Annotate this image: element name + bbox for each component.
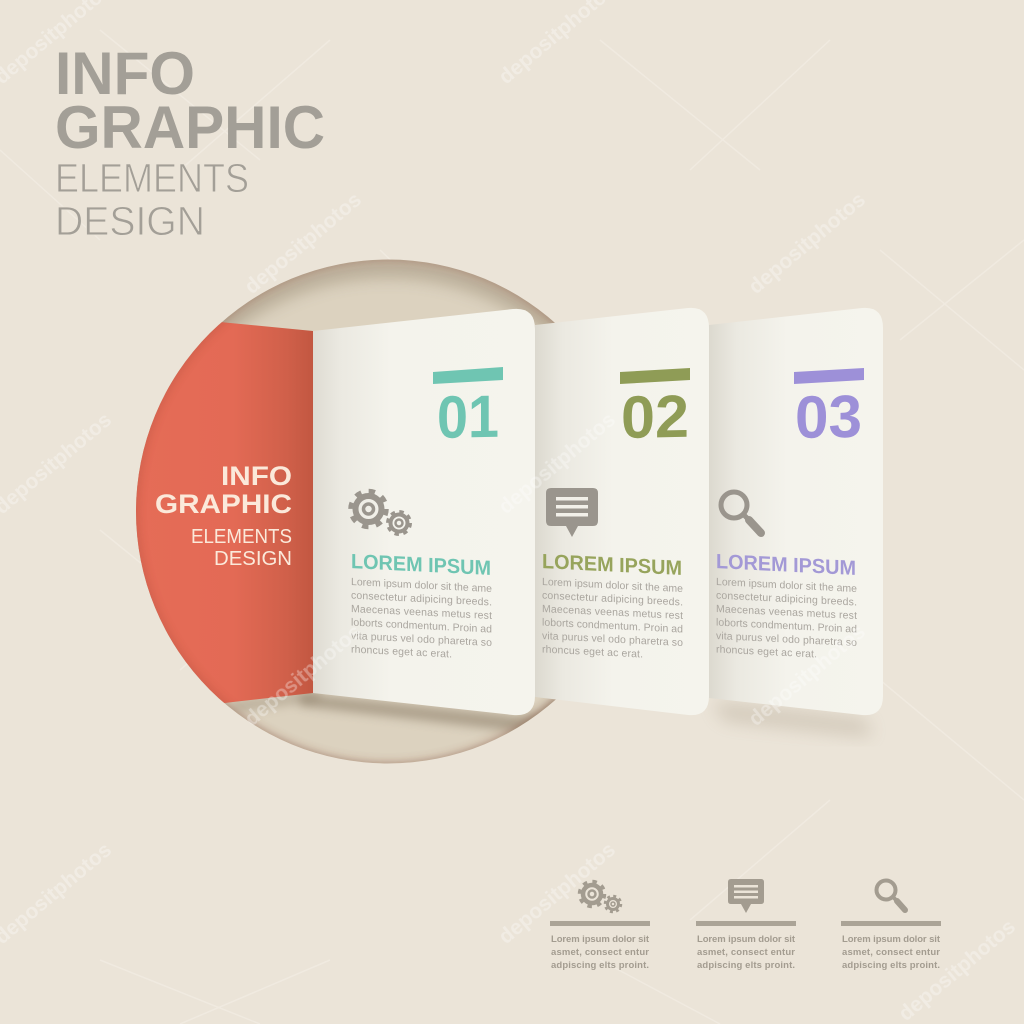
bottom legend: magnifier [841, 880, 941, 971]
title: ELEMENTS [55, 155, 249, 201]
card 1 body text: Maecenas veenas metus rest [351, 603, 492, 622]
card 3 body text: Lorem ipsum dolor sit the ame [716, 576, 857, 595]
red panel heading: GRAPHIC [155, 489, 292, 519]
card 2 body text [542, 576, 683, 661]
card 1 body text: loborts condmentum. Proin ad [351, 617, 492, 636]
card 2 body text: consectetur adipicing breeds. [542, 590, 683, 609]
caption: adpiscing elts proint. [842, 960, 940, 971]
card 1 body text: Lorem ipsum dolor sit the ame [351, 576, 492, 595]
divider bar [696, 921, 796, 926]
red panel heading: ELEMENTS [191, 526, 292, 548]
icon: small gears [580, 882, 621, 912]
card 2 number: 02 [621, 383, 689, 451]
caption: asmet, consect entur [551, 947, 649, 958]
card 2 number bar [620, 368, 690, 384]
card 2 [535, 308, 709, 715]
card 1 heading: LOREM IPSUM [351, 550, 491, 580]
red panel [136, 260, 556, 764]
watermark: depositphotos [240, 188, 366, 299]
caption [842, 934, 941, 971]
title [55, 40, 325, 244]
watermark: depositphotos [494, 838, 620, 949]
card 1 number: 01 [437, 383, 499, 451]
red panel heading: DESIGN [214, 548, 292, 570]
bottom legend: gears [550, 882, 650, 971]
card 3 body text [716, 576, 857, 661]
card 1 body text: consectetur adipicing breeds. [351, 590, 492, 609]
icon: gears [350, 491, 410, 534]
divider bar [550, 921, 650, 926]
caption: adpiscing elts proint. [551, 960, 649, 971]
red panel heading: INFO [221, 461, 292, 491]
card 3 body text: vita purus vel odo pharetra so [716, 630, 857, 649]
card 3 heading: LOREM IPSUM [716, 550, 856, 580]
watermark: depositphotos [494, 408, 620, 519]
caption: Lorem ipsum dolor sit [697, 934, 796, 945]
card 2 body text: Lorem ipsum dolor sit the ame [542, 576, 683, 595]
card 2 body text: vita purus vel odo pharetra so [542, 630, 683, 649]
card 3 body text: consectetur adipicing breeds. [716, 590, 857, 609]
card 2 body text: Maecenas veenas metus rest [542, 603, 683, 622]
title: DESIGN [55, 198, 205, 244]
watermark: depositphotos [744, 188, 870, 299]
icon: magnifier [721, 492, 761, 533]
caption: adpiscing elts proint. [697, 960, 795, 971]
card 3 number bar [794, 368, 864, 384]
divider bar [841, 921, 941, 926]
card 2 body text: loborts condmentum. Proin ad [542, 617, 683, 636]
title: GRAPHIC [55, 94, 325, 161]
caption [697, 934, 796, 971]
watermark: depositphotos [240, 620, 366, 731]
card 1 body text: rhoncus eget ac erat. [351, 644, 452, 661]
card 3 body text: rhoncus eget ac erat. [716, 644, 817, 661]
card shadow [712, 702, 872, 736]
card 3 number: 03 [795, 383, 862, 451]
caption: asmet, consect entur [842, 947, 940, 958]
caption [551, 934, 650, 971]
bottom legend: speech bubble [696, 879, 796, 971]
card 1 body text [351, 576, 492, 661]
card 1 [313, 309, 535, 715]
icon: speech bubble [546, 488, 598, 537]
caption: Lorem ipsum dolor sit [551, 934, 650, 945]
watermark: depositphotos [894, 915, 1020, 1024]
card 3 body text: Maecenas veenas metus rest [716, 603, 857, 622]
title: INFO [55, 40, 195, 107]
watermark: depositphotos [744, 620, 870, 731]
card 2 body text: rhoncus eget ac erat. [542, 644, 643, 661]
caption: asmet, consect entur [697, 947, 795, 958]
circular cut-out hole [136, 260, 556, 764]
caption: Lorem ipsum dolor sit [842, 934, 941, 945]
icon: small speech bubble [728, 879, 764, 913]
card 3 body text: loborts condmentum. Proin ad [716, 617, 857, 636]
card 1 number bar [433, 367, 503, 384]
card 1 body text: vita purus vel odo pharetra so [351, 630, 492, 649]
card 3 [709, 308, 883, 715]
card 2 heading: LOREM IPSUM [542, 550, 682, 580]
icon: small magnifier [876, 880, 905, 910]
red panel heading [155, 461, 292, 570]
